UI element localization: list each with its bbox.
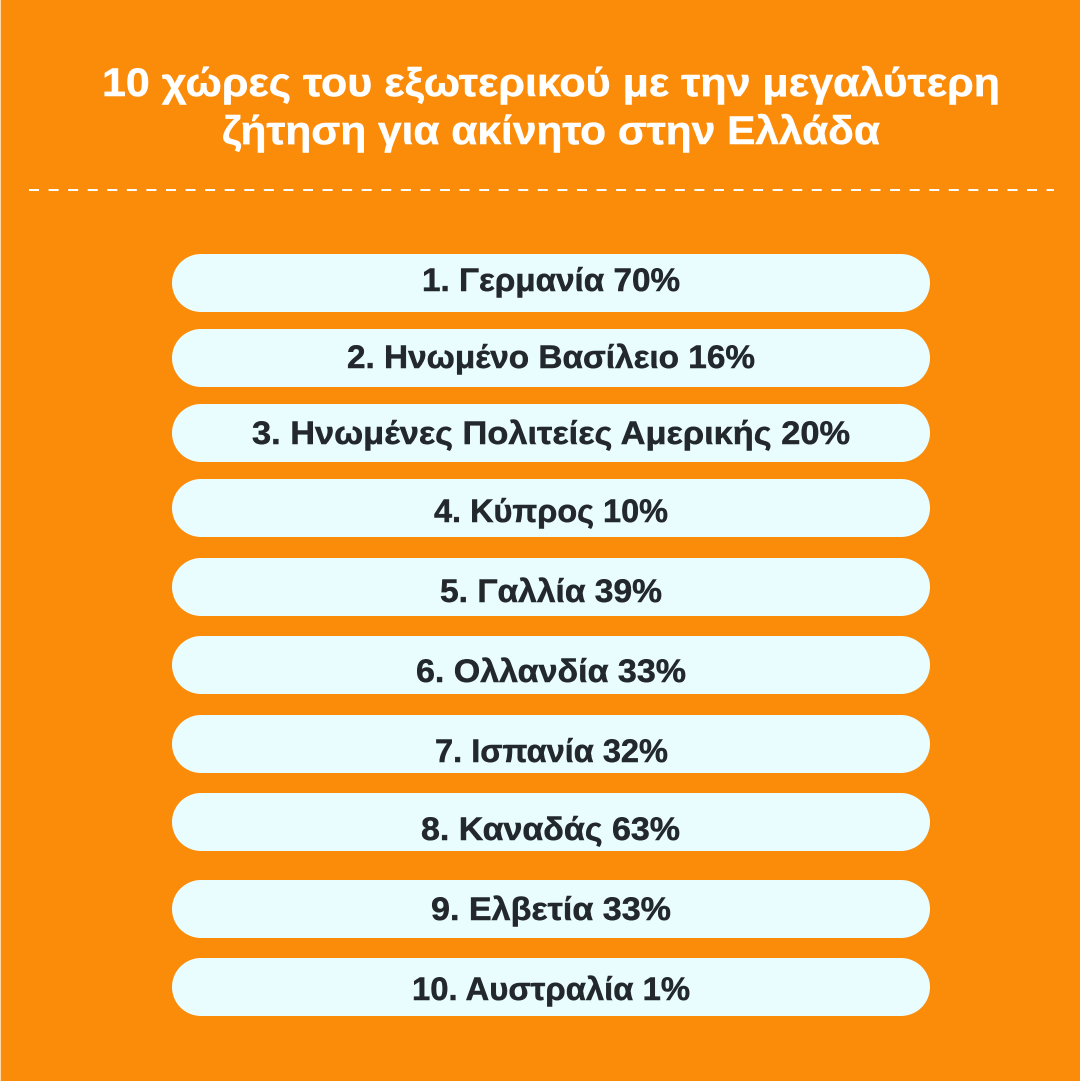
title: [102, 61, 1000, 153]
row 5: France: 5. Γαλλία 39%: [440, 573, 662, 609]
row 4: Cyprus: [172, 479, 930, 537]
row 9: Switzerland: 9. Ελβετία 33%: [431, 891, 671, 927]
row 6: Netherlands: 6. Ολλανδία 33%: [416, 653, 686, 689]
row 6: Netherlands: [172, 636, 930, 694]
row 8: Canada: [172, 793, 930, 851]
row 5: France: [172, 558, 930, 616]
row 1: Germany: 1. Γερμανία 70%: [422, 262, 680, 298]
row 1: Germany: [172, 254, 930, 312]
row 7: Spain: 7. Ισπανία 32%: [435, 733, 668, 769]
row 2: United Kingdom: 2. Ηνωμένο Βασίλειο 16%: [347, 339, 755, 375]
row 2: United Kingdom: [172, 329, 930, 387]
row 4: Cyprus: 4. Κύπρος 10%: [434, 493, 668, 529]
list of countries: [172, 254, 930, 1016]
row 10: Australia: 10. Αυστραλία 1%: [412, 971, 690, 1007]
row 7: Spain: [172, 715, 930, 773]
row 10: Australia: [172, 958, 930, 1016]
title: ζήτηση για ακίνητο στην Ελλάδα: [222, 109, 880, 153]
row 9: Switzerland: [172, 880, 930, 938]
title: 10 χώρες του εξωτερικού με την μεγαλύτερη: [102, 61, 1000, 105]
row 3: United States: 3. Ηνωμένες Πολιτείες Αμερικής 20%: [252, 415, 850, 451]
row 8: Canada: 8. Καναδάς 63%: [421, 811, 680, 847]
row 3: United States: [172, 404, 930, 462]
